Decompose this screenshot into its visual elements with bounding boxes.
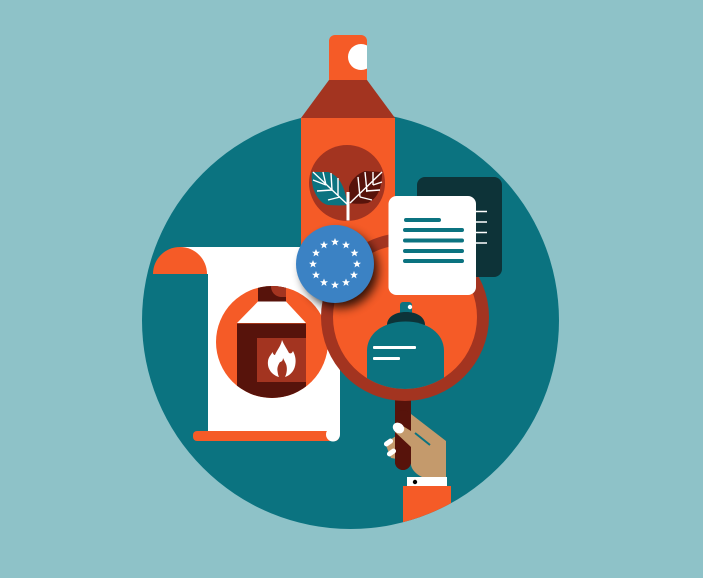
bottle with leaf emblem (301, 35, 395, 258)
shirt cuff (407, 477, 447, 486)
sleeve (403, 486, 451, 522)
white document (388, 196, 476, 295)
EU badge shadow (302, 232, 378, 308)
teal circle (142, 112, 559, 529)
icon: plant leaves (309, 145, 385, 221)
spray can in lens (367, 302, 444, 389)
scroll with flammable bottle (153, 247, 340, 442)
flammable icon badge (216, 286, 328, 400)
hand holding magnifier (384, 414, 451, 522)
EU badge (296, 225, 374, 303)
magnifying glass (321, 233, 489, 470)
icon: flame (268, 340, 296, 377)
dark document (417, 177, 502, 277)
